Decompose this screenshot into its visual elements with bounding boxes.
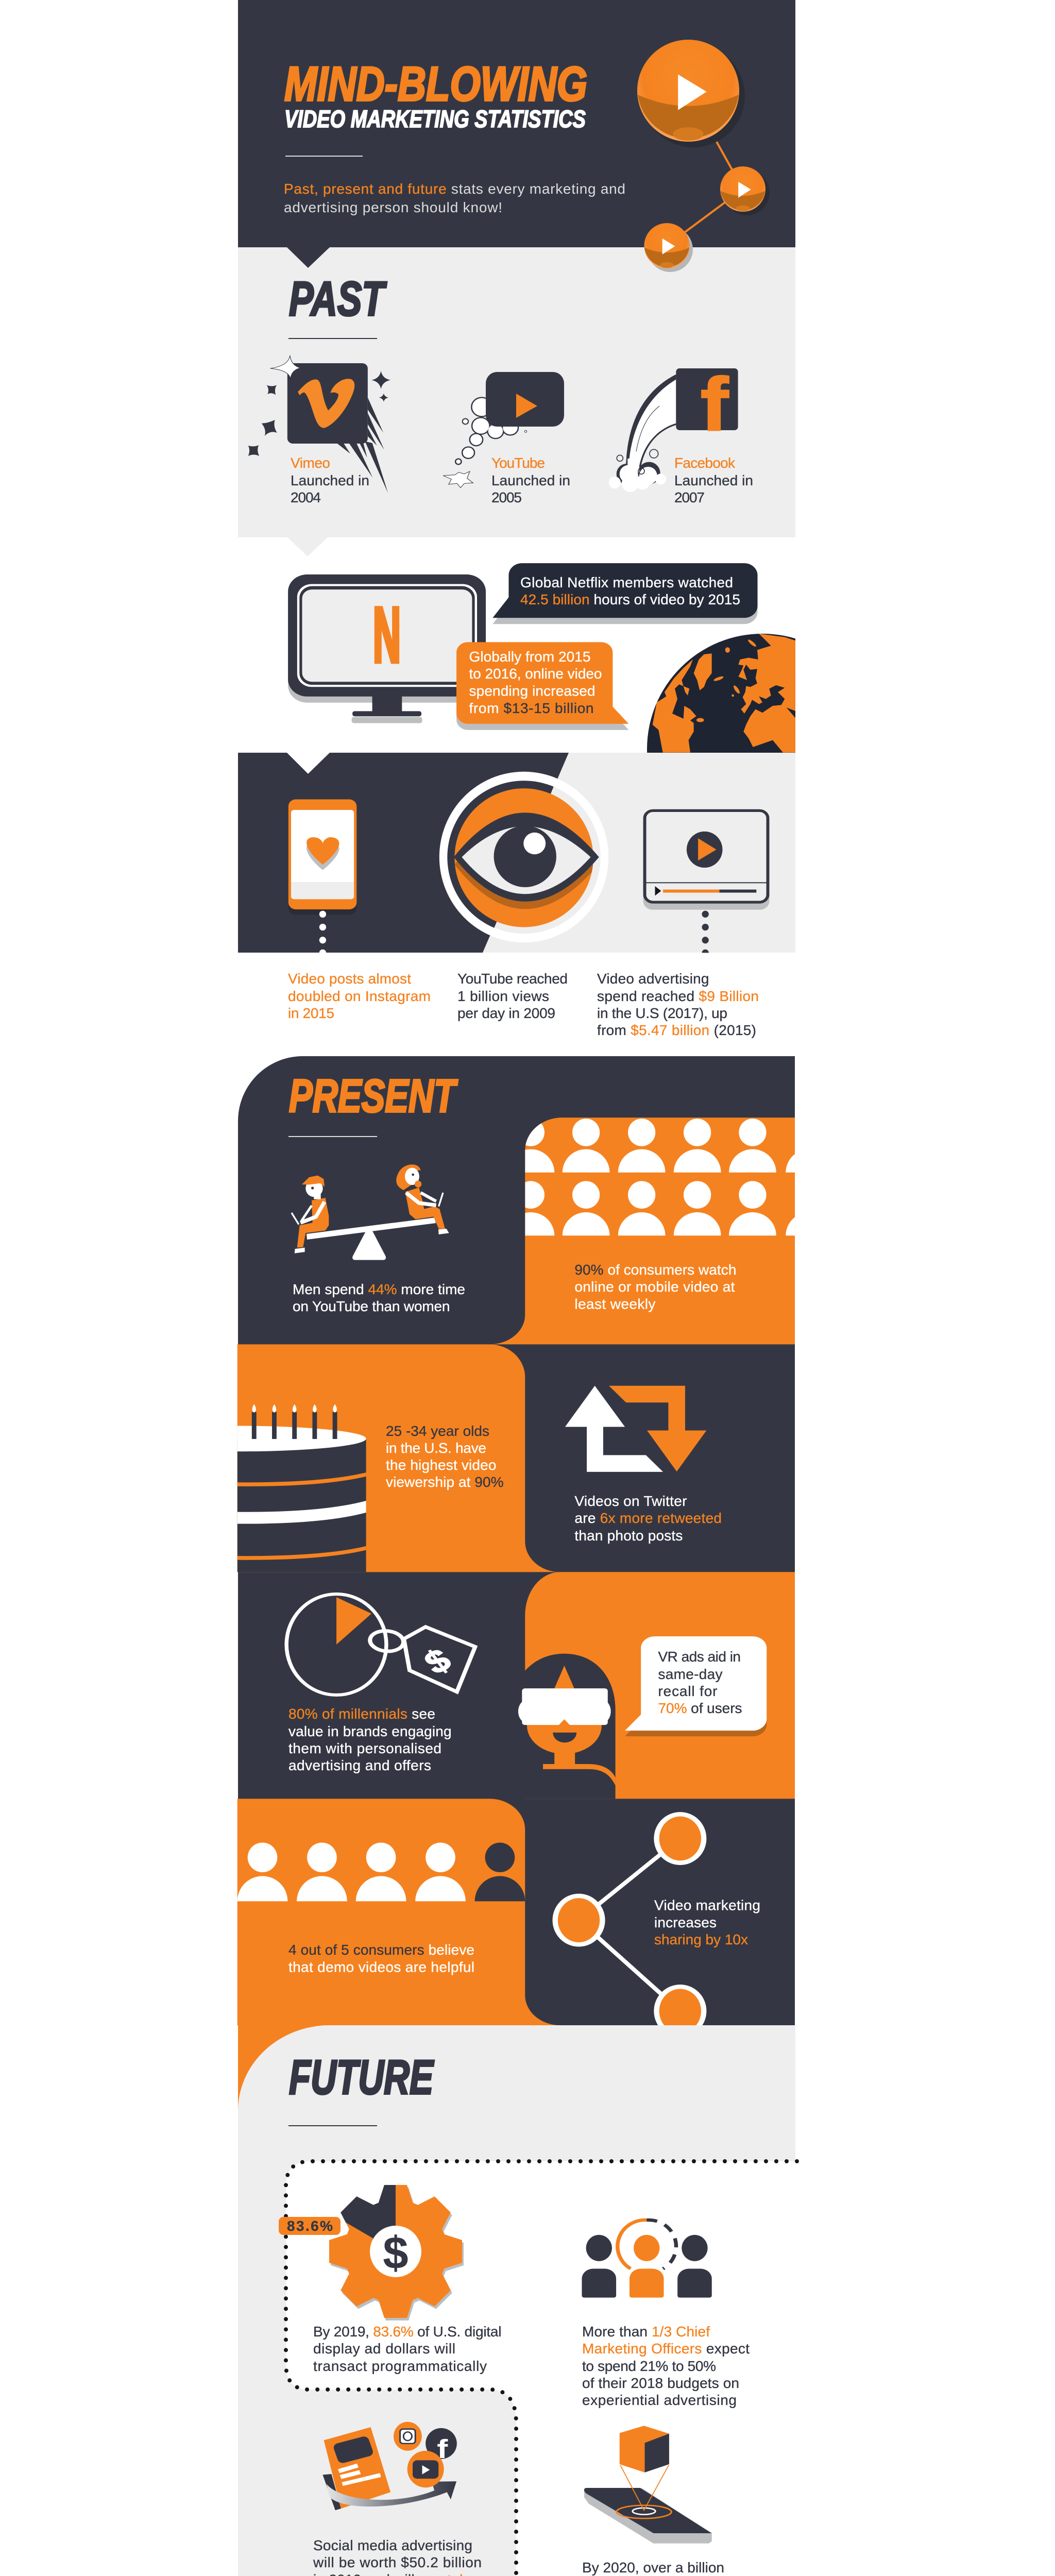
- panel: age group cake: [237, 1344, 559, 1572]
- text: cmo: experiential advertising: [582, 2392, 737, 2408]
- text: N: [373, 591, 401, 678]
- icon: seesaw: [292, 1164, 449, 1260]
- text: facebook launch: Launched in: [674, 472, 753, 488]
- text: instagram: in 2015: [288, 1005, 334, 1021]
- icon: globe: [647, 634, 795, 753]
- panel: 90 percent consumers: [490, 1117, 795, 1345]
- text: 90 percent: 90% of consumers watch: [574, 1262, 736, 1278]
- icon: chief marketing officers: [582, 2220, 712, 2298]
- text: programmatic: transact programmatically: [313, 2358, 487, 2374]
- icon: social media overtaking newspaper: [322, 2422, 457, 2510]
- text: 25-34 year olds: viewership at 90%: [386, 1474, 504, 1490]
- text: vimeo launch: [291, 455, 369, 505]
- text: 90 percent: least weekly: [574, 1296, 655, 1312]
- callout: vr ads: 70% of users: [658, 1700, 742, 1716]
- title: MIND-BLOWING: [284, 57, 587, 111]
- text: instagram: [288, 971, 431, 1021]
- text: youtube launch: [491, 455, 570, 505]
- text: youtube views: 1 billion views: [457, 988, 549, 1004]
- text: programmatic: [313, 2324, 502, 2374]
- text: twitter: [574, 1493, 722, 1544]
- icon: pie chart with price tag: $: [418, 1642, 458, 1681]
- text: 90 percent: online or mobile video at: [574, 1279, 735, 1295]
- panel: stats band: [238, 753, 795, 953]
- text: millennials: [288, 1706, 452, 1773]
- text: video advertising: spend reached $9 Billion: [597, 988, 759, 1004]
- text: cmo: More than 1/3 Chief: [582, 2324, 710, 2340]
- text: youtube views: per day in 2009: [457, 1005, 555, 1021]
- text: vimeo launch: Launched in: [291, 472, 369, 488]
- icon: facebook: [609, 368, 738, 492]
- callout: vr ads: same-day: [658, 1666, 722, 1682]
- icon: phone with heart: [288, 800, 356, 953]
- callout: netflix hours: [492, 563, 758, 624]
- text: cmo: [582, 2324, 750, 2408]
- callout: vr ads: VR ads aid in: [658, 1649, 741, 1665]
- text: social media advertising: Social media advertising: [313, 2537, 472, 2553]
- heading: future: FUTURE: [289, 2050, 434, 2104]
- text: youtube launch: Launched in: [491, 472, 570, 488]
- callout: online video spending: to 2016, online video: [469, 666, 602, 682]
- text: millennials: value in brands engaging: [288, 1723, 452, 1739]
- text: video advertising: [597, 971, 759, 1038]
- icon: gear with dollar: $: [383, 2227, 408, 2278]
- callout: online video spending: from $13-15 billion: [469, 700, 593, 716]
- text: youtube views: YouTube reached: [457, 971, 568, 987]
- heading: present: PRESENT: [289, 1071, 458, 1122]
- text: facebook launch: [674, 455, 753, 505]
- text: social media advertising: will be worth $50.2 billion: [313, 2554, 482, 2570]
- panel: future corner: [238, 2025, 331, 2113]
- text: twitter: are 6x more retweeted: [574, 1510, 722, 1526]
- text: 90 percent: [574, 1262, 736, 1312]
- text: youtube views: [457, 971, 568, 1021]
- text: social media advertising: [313, 2537, 482, 2576]
- icon: sharing network: [555, 1814, 704, 2036]
- panel: header background: [238, 0, 795, 247]
- text: twitter: Videos on Twitter: [574, 1493, 687, 1509]
- text: youtube launch: YouTube: [491, 455, 545, 471]
- text: twitter: than photo posts: [574, 1528, 683, 1544]
- text: demo videos: 4 out of 5 consumers believe: [288, 1942, 474, 1958]
- icon: vimeo: [248, 355, 390, 493]
- text: instagram: Video posts almost: [288, 971, 411, 987]
- text: men spend: Men spend 44% more time: [293, 1281, 465, 1297]
- icon: facebook f: f: [701, 362, 728, 446]
- icon: connected play buttons: [637, 40, 770, 272]
- text: vimeo launch: 2004: [291, 489, 321, 505]
- text: demo videos: that demo videos are helpful: [288, 1959, 474, 1975]
- text: sharing: Video marketing: [654, 1897, 760, 1913]
- icon: ar phone with cube: [584, 2426, 712, 2544]
- callout: netflix hours: Global Netflix members watched: [520, 574, 733, 590]
- text: facebook launch: 2007: [674, 489, 705, 505]
- text: millennials: them with personalised: [288, 1740, 441, 1756]
- callout: online video spending: spending increased: [469, 683, 595, 699]
- text: programmatic: display ad dollars will: [313, 2341, 455, 2357]
- badge: 83.6 percent: [279, 2217, 341, 2235]
- text: video advertising: from $5.47 billion (2015): [597, 1022, 756, 1038]
- icon: retweet arrows: [565, 1386, 706, 1472]
- icon: social media overtaking newspaper: f: [437, 2434, 448, 2464]
- text: millennials: advertising and offers: [288, 1757, 431, 1773]
- panel: vr recall: [518, 1572, 795, 1799]
- text: cmo: Marketing Officers expect: [582, 2341, 750, 2357]
- panel: future background: [238, 2025, 795, 2576]
- icon: pie chart with price tag: [286, 1594, 475, 1695]
- text: 25-34 year olds: in the U.S. have: [386, 1440, 486, 1456]
- text: demo videos: [288, 1942, 474, 1975]
- text: sharing: increases: [654, 1914, 717, 1930]
- text: youtube launch: 2005: [491, 489, 522, 505]
- text: men spend: [293, 1281, 465, 1314]
- icon: gear with dollar: [329, 2185, 464, 2320]
- text: 25-34 year olds: the highest video: [386, 1457, 497, 1473]
- text: video advertising: Video advertising: [597, 971, 709, 987]
- text: 25-34 year olds: [386, 1423, 504, 1490]
- text: vimeo launch: Vimeo: [291, 455, 330, 471]
- text: cmo: of their 2018 budgets on: [582, 2375, 739, 2391]
- panel: white dotted path region: [284, 2161, 795, 2576]
- callout: vr ads: recall for: [658, 1683, 717, 1699]
- panel: 4 out of 5 consumers: [237, 1799, 560, 2025]
- text: millennials: 80% of millennials see: [288, 1706, 435, 1722]
- callout: online video spending: Globally from 2015: [469, 649, 590, 665]
- title: VIDEO MARKETING STATISTICS: [284, 105, 586, 132]
- icon: eye: [439, 772, 608, 942]
- text: cmo: to spend 21% to 50%: [582, 2358, 716, 2374]
- text: video advertising: in the U.S (2017), up: [597, 1005, 727, 1021]
- title: [284, 57, 587, 132]
- text: instagram: doubled on Instagram: [288, 988, 431, 1004]
- callout: online video spending: [456, 642, 628, 730]
- text: facebook launch: Facebook: [674, 455, 736, 471]
- text: sharing: [654, 1897, 760, 1947]
- icon: youtube player: [486, 372, 564, 427]
- subtitle: [284, 156, 625, 215]
- text: programmatic: By 2019, 83.6% of U.S. digital: [313, 2324, 502, 2340]
- icon: netflix monitor: [288, 574, 486, 723]
- header notch arrow: [287, 247, 330, 268]
- icon: youtube: [443, 398, 527, 488]
- subtitle: Past, present and future stats every marketing and: [284, 181, 625, 197]
- text: ar vr: By 2020, over a billion: [582, 2560, 724, 2575]
- panel: past background: [238, 247, 795, 537]
- past notch arrow: [287, 537, 328, 556]
- heading: past: PAST: [289, 272, 387, 326]
- badge: 83.6 percent: 83.6%: [287, 2218, 333, 2234]
- icon: video player: [643, 810, 769, 953]
- dotted line path: [284, 2161, 797, 2576]
- text: sharing: sharing by 10x: [654, 1931, 748, 1947]
- callout: vr ads: [625, 1636, 767, 1736]
- text: 25-34 year olds: 25 -34 year olds: [386, 1423, 489, 1439]
- callout: netflix hours: 42.5 billion hours of video by 2015: [520, 591, 740, 607]
- subtitle: advertising person should know!: [284, 199, 502, 215]
- panel: present background: [238, 1056, 795, 2025]
- text: men spend: on YouTube than women: [293, 1298, 450, 1314]
